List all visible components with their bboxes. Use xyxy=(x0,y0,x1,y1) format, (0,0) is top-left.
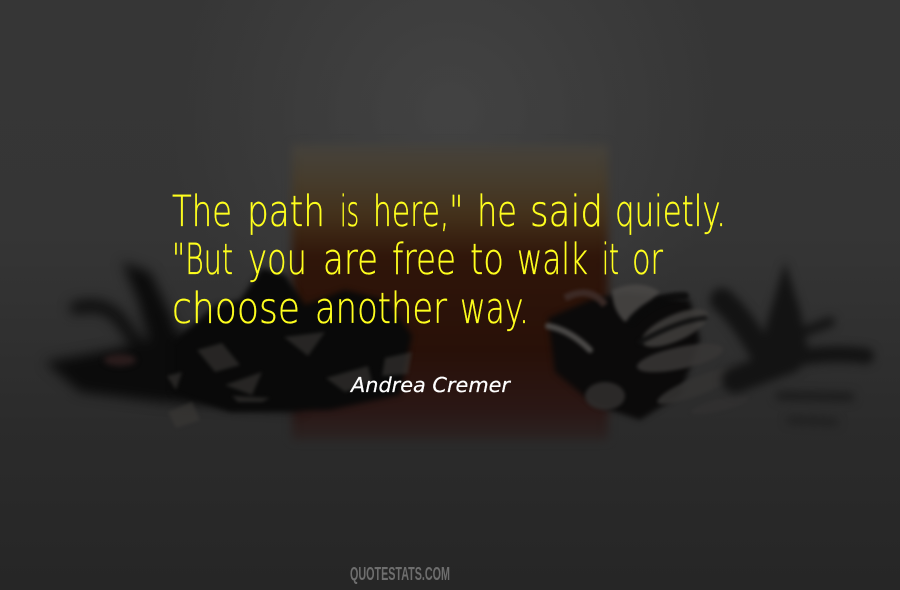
quote line 2: free xyxy=(392,235,456,285)
quote line 1: said xyxy=(530,187,603,237)
quote line 3: another xyxy=(315,284,447,334)
quote line 1: path xyxy=(247,187,325,237)
right pine cone scales xyxy=(548,284,751,418)
right pine cone xyxy=(548,292,700,420)
blurred far-right pine sprig xyxy=(722,262,866,422)
quote line 2: walk xyxy=(517,235,588,285)
watermark: QUOTESTATS.COM xyxy=(350,564,450,584)
quote line 2: are xyxy=(323,235,378,285)
quote line 1: quietly. xyxy=(615,187,726,237)
quote line 2: or xyxy=(632,235,663,285)
quote line 3: choose xyxy=(172,284,300,334)
quote text xyxy=(172,187,726,334)
quote line 2: it xyxy=(602,235,619,285)
blurred far-left pine sprig xyxy=(45,262,300,410)
quote line 3: way. xyxy=(460,284,529,334)
quote line 3 xyxy=(172,284,529,334)
quote line 2: "But xyxy=(172,235,233,285)
author name: Andrea Cremer xyxy=(349,373,512,397)
quote line 1: The xyxy=(172,187,232,237)
left pine cone scales xyxy=(167,332,412,428)
left sprig reddish tint xyxy=(104,354,136,366)
blurred candle xyxy=(292,145,608,440)
quote line 2: to xyxy=(470,235,504,285)
quote line 2 xyxy=(172,235,663,285)
quote line 1 xyxy=(172,187,726,237)
quote line 2: you xyxy=(248,235,307,285)
quote line 1: is xyxy=(340,187,359,237)
left pine cone xyxy=(172,268,412,412)
quote line 1: he xyxy=(477,187,517,237)
quote line 1: here," xyxy=(373,187,463,237)
